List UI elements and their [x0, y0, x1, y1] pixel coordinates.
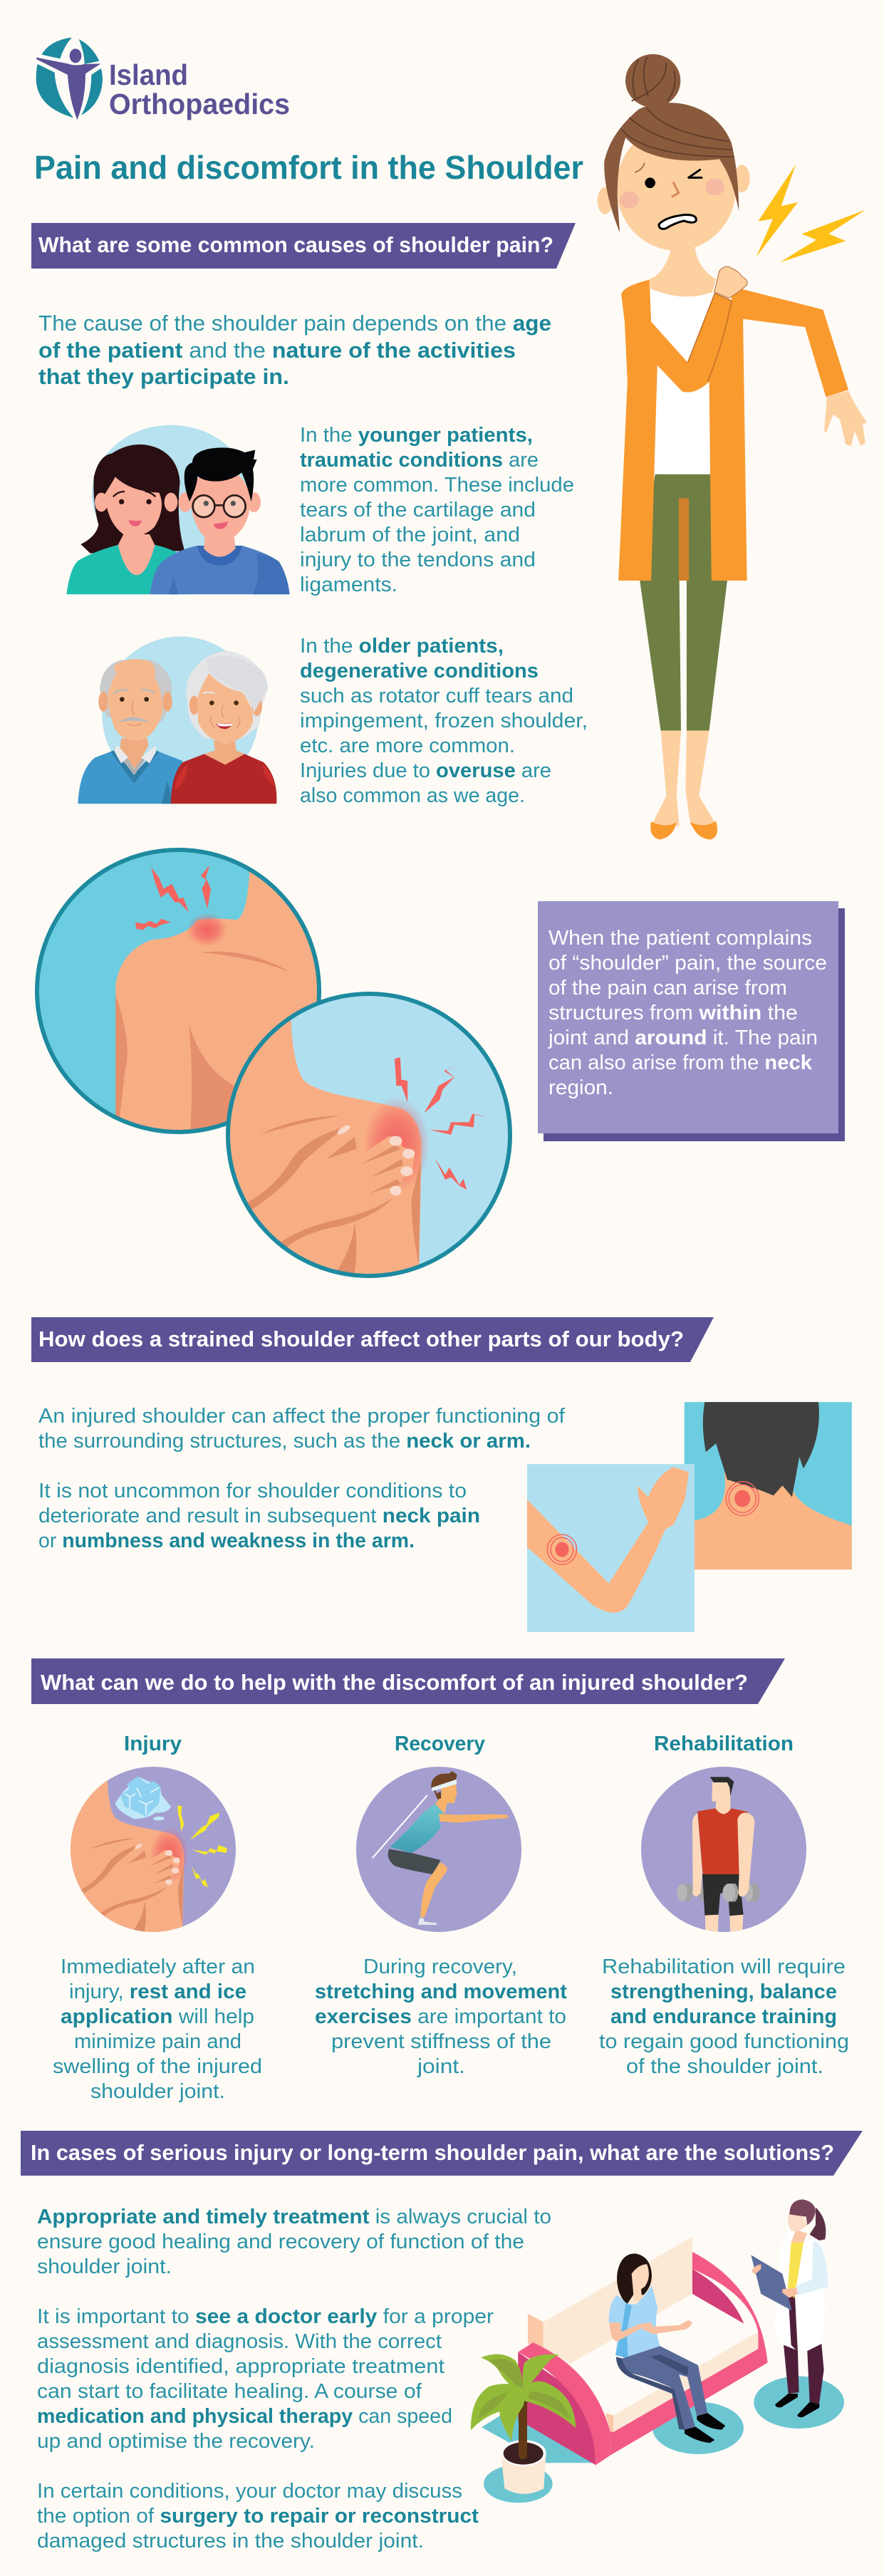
title: Pain and discomfort in the Shoulder — [34, 149, 583, 186]
younger patients text: traumatic conditions are — [300, 449, 539, 472]
body and clothing — [618, 280, 867, 840]
injury text: shoulder joint. — [90, 2080, 225, 2103]
callout: source of shoulder pain: can also arise from the neck — [548, 1051, 812, 1074]
illustration: hand on painful shoulder circle — [215, 989, 510, 1284]
recovery text: joint. — [417, 2055, 465, 2078]
section banner: common causes: What are some common causes of shoulder pain? — [38, 232, 553, 257]
recovery text: stretching and movement — [315, 1980, 568, 2003]
older patients text: Injuries due to overuse are — [300, 759, 551, 782]
solutions text: Appropriate and timely treatment is always crucial to — [37, 2206, 551, 2228]
section banner: strained shoulder: How does a strained shoulder affect other parts of our body? — [38, 1326, 684, 1351]
heading: recovery: Recovery — [395, 1733, 485, 1755]
recovery text — [315, 1956, 568, 2078]
injury text: minimize pain and — [74, 2030, 241, 2053]
solutions text: shoulder joint. — [37, 2255, 172, 2278]
intro text — [38, 311, 551, 389]
older patients text: also common as we age. — [300, 784, 525, 807]
logo text: Island — [109, 58, 188, 91]
potted plant — [471, 2354, 576, 2494]
injury text: Immediately after an — [61, 1956, 255, 1978]
younger patients text: ligaments. — [300, 573, 397, 596]
intro text: The cause of the shoulder pain depends on the age — [38, 311, 551, 336]
strained shoulder text: It is not uncommon for shoulder conditions to — [38, 1480, 467, 1502]
logo text: Orthopaedics — [109, 88, 290, 120]
callout: source of shoulder pain: structures from within the — [548, 1002, 798, 1024]
column: rehabilitation — [599, 1733, 849, 2078]
strained shoulder text: the surrounding structures, such as the neck or arm. — [38, 1430, 531, 1453]
younger patients text — [300, 424, 574, 596]
illustration: patient and doctor with sofa — [471, 2199, 844, 2503]
older patients text: such as rotator cuff tears and — [300, 685, 573, 707]
older woman — [171, 651, 276, 804]
logo mark — [36, 38, 103, 120]
younger patients text: injury to the tendons and — [300, 549, 536, 571]
solutions text: ensure good healing and recovery of function of the — [37, 2230, 524, 2253]
section banner: helping the discomfort: What can we do to help with the discomfort of an injured shoulder? — [41, 1670, 748, 1695]
section banner: helping the discomfort — [31, 1658, 785, 1704]
icon: squatting exercise — [356, 1767, 521, 1932]
illustration: older couple — [78, 636, 276, 804]
callout: source of shoulder pain: of “shoulder” pain, the source — [548, 952, 827, 975]
solutions text: In certain conditions, your doctor may discuss — [37, 2480, 462, 2503]
solutions text: up and optimise the recovery. — [37, 2430, 315, 2453]
section banner: solutions: In cases of serious injury or long-term shoulder pain, what are the solutions? — [31, 2140, 834, 2165]
illustration: woman with shoulder pain — [598, 54, 867, 840]
older patients text: degenerative conditions — [300, 660, 539, 682]
strained shoulder text: deteriorate and result in subsequent neck pain — [38, 1505, 480, 1527]
callout: source of shoulder pain: joint and around it. The pain — [548, 1027, 818, 1049]
rehabilitation text: Rehabilitation will require — [602, 1956, 846, 1978]
sofa — [518, 2237, 768, 2466]
head and pained face — [598, 54, 866, 298]
solutions text: assessment and diagnosis. With the correct — [37, 2330, 442, 2353]
callout: source of shoulder pain: of the pain can arise from — [548, 977, 787, 999]
solutions text: the option of surgery to repair or reconstruct — [37, 2505, 479, 2528]
recovery text: During recovery, — [363, 1956, 517, 1978]
older patients text: impingement, frozen shoulder, — [300, 710, 588, 732]
section banner: common causes — [31, 223, 576, 269]
section banner: solutions — [21, 2131, 863, 2176]
solutions text — [37, 2206, 551, 2552]
heading: rehabilitation: Rehabilitation — [654, 1733, 794, 1755]
younger patients text: tears of the cartilage and — [300, 499, 536, 521]
illustration: younger couple — [66, 425, 290, 594]
illustration: arm numbness panel — [527, 1464, 695, 1632]
solutions text: medication and physical therapy can speed — [37, 2405, 452, 2428]
older man — [78, 659, 183, 804]
strained shoulder text: An injured shoulder can affect the proper functioning of — [38, 1405, 565, 1428]
injury text — [53, 1956, 262, 2103]
rehabilitation text: and endurance training — [610, 2005, 837, 2028]
older patients text: In the older patients, — [300, 635, 504, 658]
intro text: of the patient and the nature of the activities — [38, 338, 516, 363]
younger patients text: more common. These include — [300, 474, 574, 497]
rehabilitation text: to regain good functioning — [599, 2030, 849, 2053]
illustration: neck and back pain circle — [37, 850, 333, 1155]
rehabilitation text: strengthening, balance — [610, 1980, 837, 2003]
strained shoulder text: or numbness and weakness in the arm. — [38, 1530, 415, 1552]
doctor — [751, 2199, 828, 2417]
column: recovery — [315, 1733, 568, 2078]
recovery text: prevent stiffness of the — [331, 2030, 551, 2053]
icon: hand on shoulder with ice — [63, 1764, 236, 1937]
section banner: strained shoulder — [31, 1317, 714, 1362]
solutions text: damaged structures in the shoulder joint. — [37, 2530, 424, 2552]
logo text — [109, 58, 290, 120]
icon: man with dumbbells — [641, 1767, 806, 1935]
strained shoulder text — [38, 1405, 565, 1552]
patient — [608, 2253, 725, 2443]
column: injury — [53, 1733, 262, 2103]
callout: source of shoulder pain: region. — [548, 1076, 613, 1099]
solutions text: diagnosis identified, appropriate treatment — [37, 2355, 444, 2378]
injury text: injury, rest and ice — [69, 1980, 246, 2003]
illustration: neck pain panel — [685, 1402, 852, 1569]
floor shapes — [482, 2377, 844, 2503]
recovery text: exercises are important to — [315, 2005, 566, 2028]
older patients text — [300, 635, 588, 807]
callout: source of shoulder pain: When the patient complains — [548, 927, 812, 950]
younger patients text: In the younger patients, — [300, 424, 533, 447]
rehabilitation text: of the shoulder joint. — [626, 2055, 823, 2078]
callout: source of shoulder pain — [538, 901, 845, 1141]
older patients text: etc. are more common. — [300, 734, 515, 757]
younger patients text: labrum of the joint, and — [300, 524, 520, 546]
injury text: application will help — [61, 2005, 254, 2028]
intro text: that they participate in. — [38, 364, 289, 389]
logo: Island Orthopaedics — [36, 38, 290, 120]
injury text: swelling of the injured — [53, 2055, 262, 2078]
solutions text: can start to facilitate healing. A course of — [37, 2380, 422, 2403]
solutions text: It is important to see a doctor early for a proper — [37, 2305, 494, 2328]
rehabilitation text — [599, 1956, 849, 2078]
heading: injury: Injury — [124, 1733, 182, 1755]
